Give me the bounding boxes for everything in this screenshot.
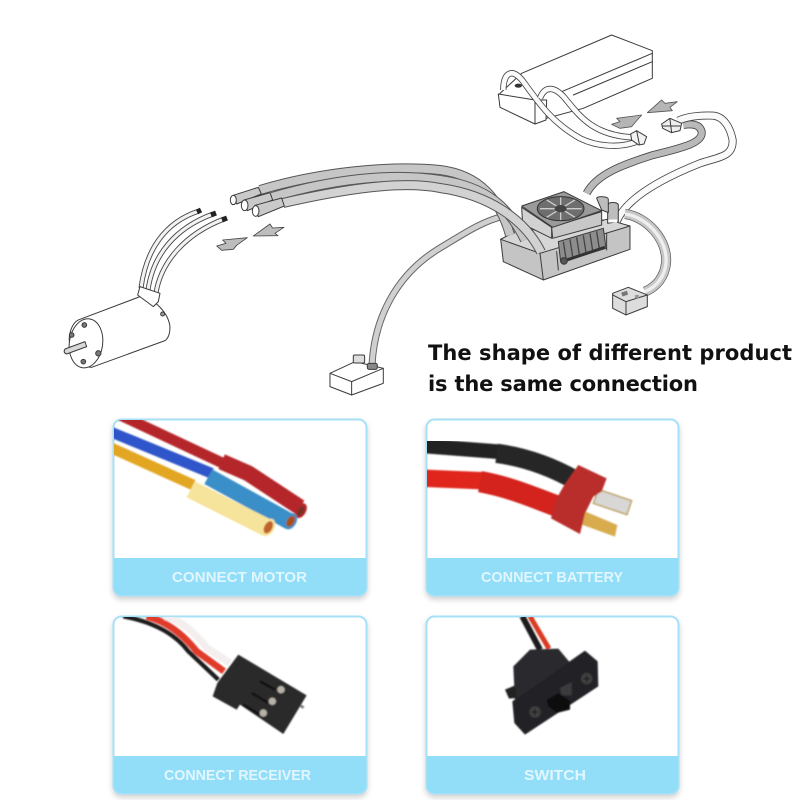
bullet connector tubes (230, 187, 284, 217)
ESC power leads (587, 116, 733, 292)
label band (114, 756, 366, 793)
label: CONNECT BATTERY (481, 569, 623, 586)
panel: connect battery (425, 420, 678, 596)
label band (427, 558, 678, 595)
battery pack (498, 35, 652, 124)
heading: is the same connection (428, 372, 698, 396)
photo: servo plug (123, 616, 307, 734)
motor (64, 287, 170, 370)
label: CONNECT MOTOR (172, 569, 307, 586)
receiver cable (372, 216, 504, 366)
motor wires (141, 210, 227, 293)
ESC motor cables (260, 168, 541, 252)
battery leads (503, 73, 637, 146)
ESC unit (501, 192, 630, 280)
panel: connect receiver (114, 616, 366, 794)
panel: switch (426, 616, 678, 794)
motor connector arrows (217, 224, 284, 250)
photo: switch harness (505, 616, 598, 735)
label band (114, 558, 366, 595)
heading (428, 341, 792, 396)
receiver plug (330, 355, 383, 395)
battery side plug (662, 118, 682, 133)
label: CONNECT RECEIVER (164, 767, 311, 784)
battery connector and arrows (612, 100, 677, 145)
label: SWITCH (524, 767, 586, 784)
heading: The shape of different product (428, 341, 792, 365)
photo: T plug connector (425, 446, 632, 537)
label band (427, 756, 678, 793)
panel: connect motor (110, 415, 367, 596)
wiring diagram (64, 35, 733, 395)
switch plug (613, 287, 647, 315)
photo: motor bullet connectors (110, 415, 309, 538)
